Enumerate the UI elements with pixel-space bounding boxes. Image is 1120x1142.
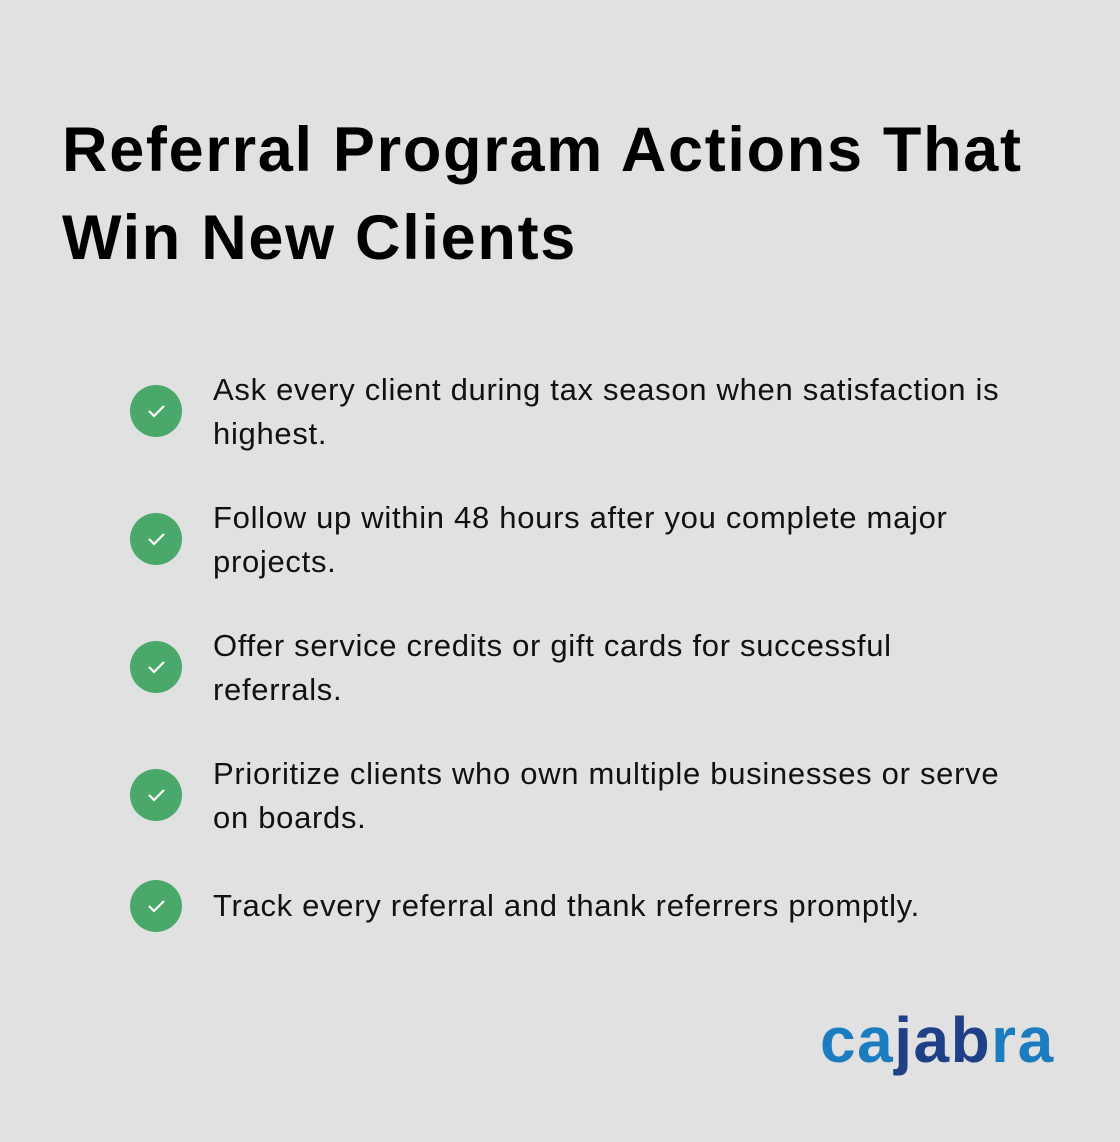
item 5 bbox=[130, 880, 920, 932]
icon: check bbox=[130, 641, 182, 693]
icon: check bbox=[130, 385, 182, 437]
text 4: Prioritize clients who own multiple businesses or serve on boards. bbox=[213, 756, 999, 835]
text 1: Ask every client during tax season when satisfaction is highest. bbox=[213, 372, 999, 451]
text 2: Follow up within 48 hours after you complete major projects. bbox=[213, 500, 948, 579]
icon: check bbox=[130, 769, 182, 821]
icon: check bbox=[130, 513, 182, 565]
title bbox=[62, 115, 1023, 273]
text 5: Track every referral and thank referrers promptly. bbox=[213, 888, 920, 923]
item 1 bbox=[130, 372, 999, 451]
text 3: Offer service credits or gift cards for successful referrals. bbox=[213, 628, 892, 707]
title: Win New Clients bbox=[62, 203, 577, 273]
icon: check bbox=[130, 880, 182, 932]
item 3 bbox=[130, 628, 892, 707]
item 2 bbox=[130, 500, 948, 579]
title: Referral Program Actions That bbox=[62, 115, 1023, 185]
item 4 bbox=[130, 756, 999, 835]
logo: cajabra bbox=[820, 1004, 1055, 1076]
